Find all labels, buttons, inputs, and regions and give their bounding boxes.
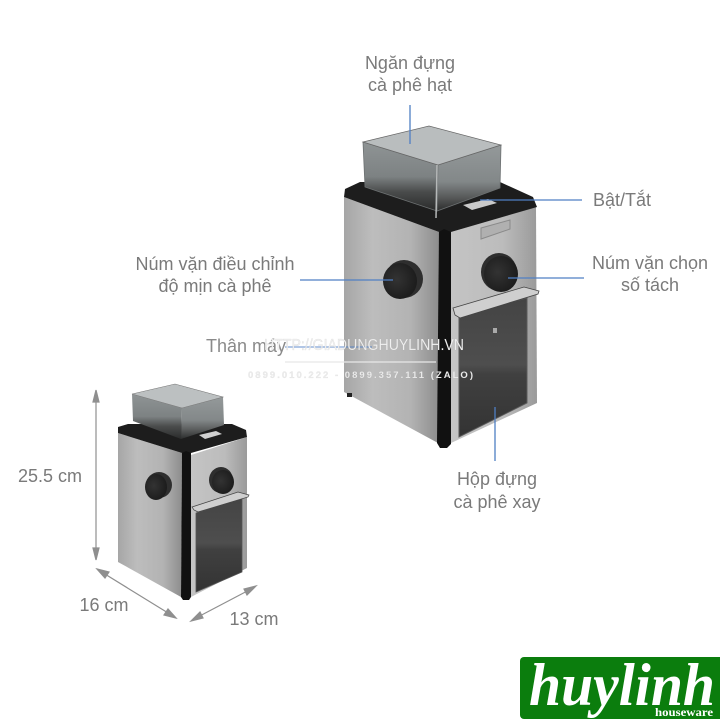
left knob <box>383 260 423 299</box>
grinder body right panel <box>451 207 537 443</box>
label: coffee bean hopper: cà phê hạt <box>368 75 452 95</box>
small left panel <box>118 433 182 597</box>
right knob <box>481 253 518 292</box>
label: ground coffee box: Hộp đựng <box>457 469 537 489</box>
black corner strip <box>437 226 451 448</box>
foot <box>347 393 352 397</box>
label: coffee bean hopper: Ngăn đựng <box>365 53 455 73</box>
watermark <box>248 337 473 381</box>
callout line: fineness knob <box>300 279 393 281</box>
brand badge <box>481 220 510 239</box>
length label: 16 cm <box>79 595 129 615</box>
logo wordmark: huylinh <box>529 652 715 718</box>
grinder body left panel <box>344 197 439 443</box>
small left knob <box>145 472 172 500</box>
width label: 13 cm <box>229 609 279 629</box>
small black strip <box>181 450 191 600</box>
label: cups knob: Núm vặn chọn <box>592 253 708 273</box>
logo <box>520 652 720 719</box>
box mark <box>493 328 497 333</box>
label: body: Thân máy <box>206 336 286 356</box>
small power switch <box>199 431 222 439</box>
label: cups knob: số tách <box>621 275 679 295</box>
label: power: Bật/Tắt <box>593 189 651 210</box>
box handle <box>453 287 539 318</box>
height label: 25.5 cm <box>18 466 82 486</box>
hopper inner edge <box>436 165 437 218</box>
callout line: hopper <box>409 105 411 144</box>
width arrow <box>191 586 256 621</box>
hopper right face <box>437 145 501 211</box>
callout line: body <box>285 346 372 348</box>
small right knob <box>209 467 234 494</box>
hopper <box>363 126 501 218</box>
black top lid <box>344 182 537 232</box>
height arrow <box>93 390 99 560</box>
callout line: ground box <box>494 407 496 461</box>
small hopper <box>132 384 224 439</box>
small coffee grinder <box>118 384 249 600</box>
label: fineness knob: độ mịn cà phê <box>158 276 272 296</box>
hopper left face <box>363 142 438 211</box>
watermark: 0899.010.222 - 0899.357.111 (ZALO) <box>248 370 473 381</box>
small right panel <box>191 437 247 597</box>
large coffee grinder <box>344 126 539 448</box>
callout line: cups knob <box>508 277 584 279</box>
length arrow <box>97 569 176 618</box>
small black lid <box>118 424 247 453</box>
label: fineness knob: Núm vặn điều chỉnh <box>135 254 295 274</box>
logo background <box>520 657 720 719</box>
power switch <box>463 199 497 210</box>
coffee ground box <box>459 298 527 437</box>
watermark: HTTP://GIADUNGHUYLINH.VN <box>264 337 464 354</box>
logo tagline: houseware <box>655 707 713 719</box>
small ground box <box>196 498 242 592</box>
label: ground coffee box: cà phê xay <box>453 492 541 512</box>
callout line: power <box>480 199 582 201</box>
small handle <box>192 492 249 512</box>
hopper top <box>363 126 501 165</box>
